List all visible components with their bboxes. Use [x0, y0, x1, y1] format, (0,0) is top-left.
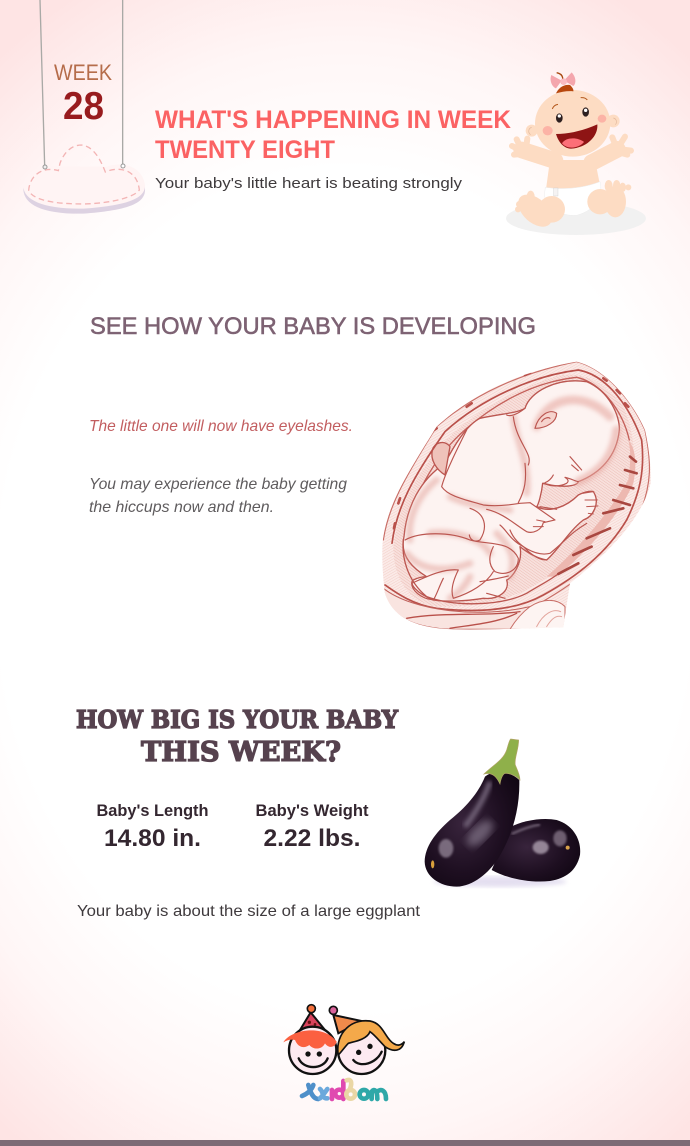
development fact: eyelashes: The little one will now have eyelashes. — [89, 418, 353, 435]
illustration: baby in the womb — [382, 362, 651, 630]
placenta — [547, 440, 635, 577]
stat: baby's weight: 2.22 lbs. — [264, 825, 360, 852]
week number: 28 — [63, 85, 104, 128]
stat: baby's weight — [256, 801, 369, 852]
icon: boy face — [283, 1005, 337, 1074]
heading: how big: THIS WEEK? — [141, 737, 341, 768]
womb wall lines — [383, 362, 649, 605]
ear and face — [535, 412, 557, 428]
development fact: hiccups: the hiccups now and then. — [89, 499, 274, 516]
fetus body — [403, 381, 619, 601]
heading: how big — [76, 705, 399, 768]
icon: girl face — [329, 1006, 404, 1074]
illustration: eggplants — [425, 739, 580, 887]
heading: development: SEE HOW YOUR BABY IS DEVELOPING — [90, 313, 536, 340]
title — [155, 106, 511, 164]
stat: baby's length — [96, 801, 208, 852]
stat: baby's length: 14.80 in. — [104, 825, 201, 852]
bottom bar — [0, 1140, 690, 1146]
uterine wall — [382, 362, 651, 630]
heading: how big: HOW BIG IS YOUR BABY — [76, 705, 399, 734]
icon: cartoon baby — [506, 72, 646, 235]
lower uterus and cervix — [383, 588, 530, 629]
logo: Kidbom — [283, 1005, 404, 1099]
subtitle: Your baby's little heart is beating strongly — [155, 175, 463, 192]
icon: hanging cloud sign — [23, 0, 145, 214]
fetus arm and leg lines — [405, 408, 587, 600]
week label: WEEK — [54, 60, 112, 85]
development fact: hiccups: You may experience the baby getting — [89, 476, 347, 493]
size comparison text: Your baby is about the size of a large eggplant — [77, 903, 421, 920]
umbilical cord — [432, 443, 450, 475]
amniotic sac — [393, 375, 634, 607]
logo wordmark — [302, 1080, 386, 1099]
development fact: hiccups — [89, 476, 347, 516]
fetus shading — [537, 400, 617, 482]
title: TWENTY EIGHT — [155, 136, 335, 164]
stat: baby's weight: Baby's Weight — [256, 801, 369, 820]
stat: baby's length: Baby's Length — [96, 801, 208, 820]
title: WHAT'S HAPPENING IN WEEK — [155, 106, 511, 134]
